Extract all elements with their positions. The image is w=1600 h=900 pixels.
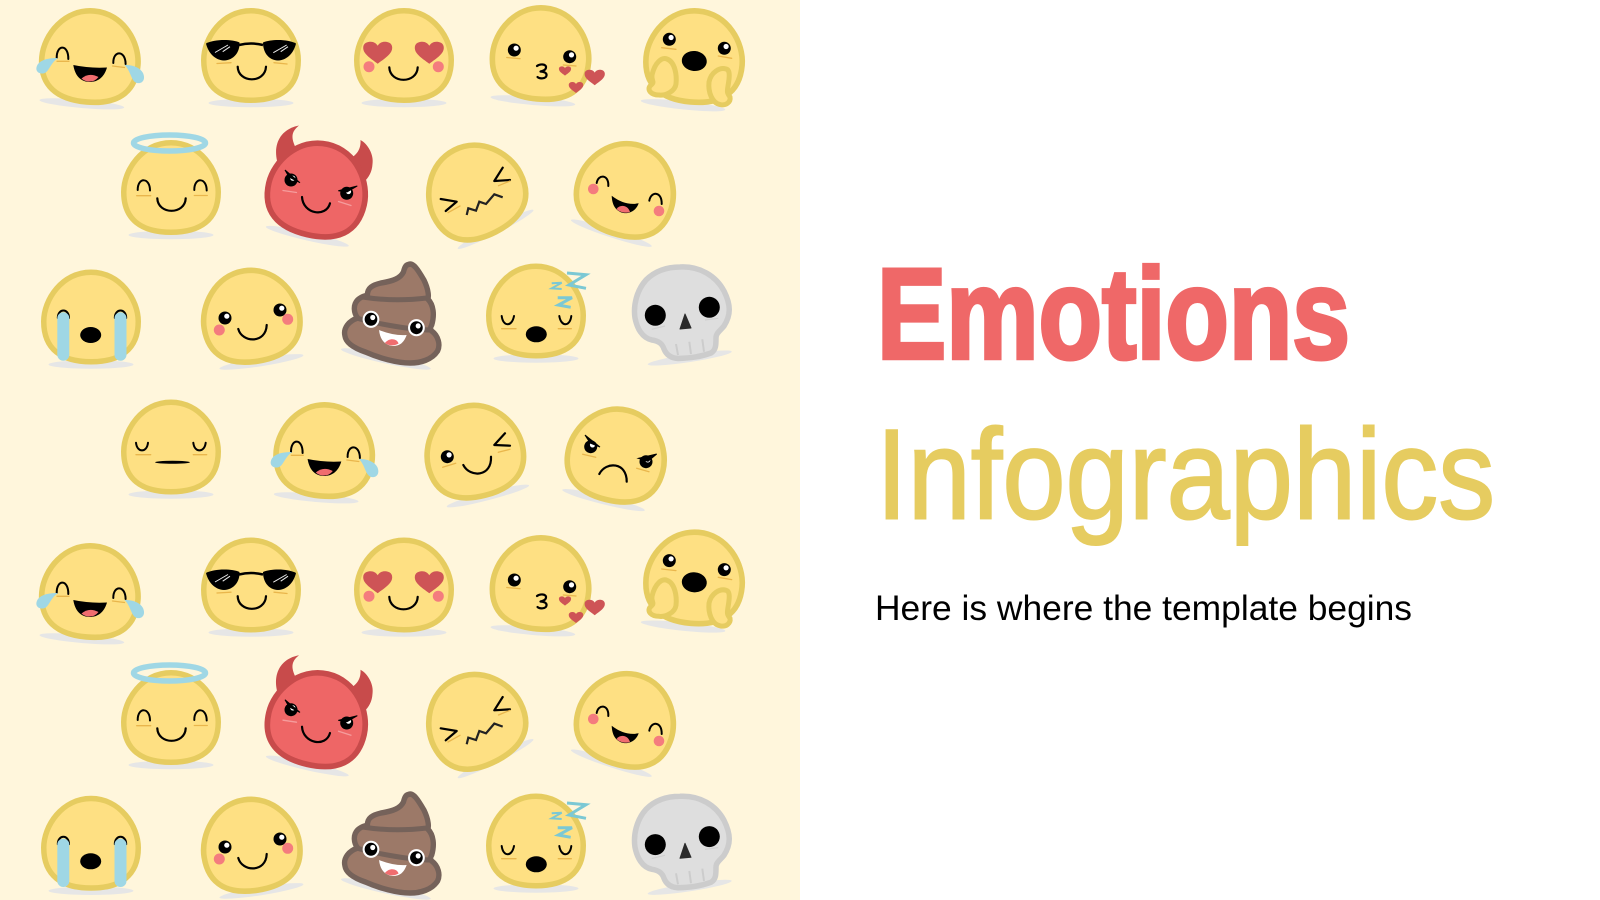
icon: kissing emoji, row five [489, 534, 605, 639]
icon: shocked emoji, row five [640, 528, 746, 635]
icon: sunglasses emoji [204, 11, 298, 107]
icon: laughing with tears emoji, row five [36, 542, 144, 647]
title: Infographics: Infographics [876, 403, 1495, 546]
icon: wincing emoji, row six [411, 657, 539, 783]
icon: shocked emoji [640, 7, 746, 114]
title: Emotions: Emotions [877, 242, 1350, 386]
icon: smiling emoji, row seven [196, 792, 306, 900]
icon: winking emoji [416, 395, 532, 511]
icon: crying emoji [44, 272, 138, 369]
icon: sunglasses emoji, row five [204, 540, 298, 637]
icon: skull emoji, row seven [634, 796, 732, 898]
icon: crying emoji, row seven [44, 799, 138, 895]
icon: heart eyes emoji [357, 11, 451, 107]
icon: laughing with tears emoji [36, 7, 144, 112]
icon: poop emoji [340, 264, 439, 373]
icon: skull emoji [634, 267, 732, 368]
icon: red devil emoji [259, 126, 376, 250]
icon: kissing emoji [489, 4, 605, 109]
subtitle: Here is where the template begins [875, 589, 1412, 628]
icon: red devil emoji, row six [259, 655, 376, 780]
icon: poop emoji, row seven [340, 794, 439, 900]
icon: happy blushing emoji [566, 131, 687, 250]
icon: sleeping emoji [489, 266, 586, 363]
panel: emoji pattern [0, 0, 800, 900]
icon: laughing with tears emoji, row four [271, 401, 378, 506]
icon: wincing emoji [411, 128, 539, 254]
icon: angry emoji [559, 399, 675, 514]
icon: happy blushing emoji, row six [566, 661, 687, 780]
icon: angel halo emoji [124, 135, 218, 239]
icon: angel halo emoji, row six [124, 665, 218, 769]
icon: heart eyes emoji, row five [357, 540, 451, 637]
icon: neutral emoji [124, 402, 218, 499]
icon: sleeping emoji, row seven [489, 796, 586, 893]
icon: smiling emoji [196, 263, 306, 373]
